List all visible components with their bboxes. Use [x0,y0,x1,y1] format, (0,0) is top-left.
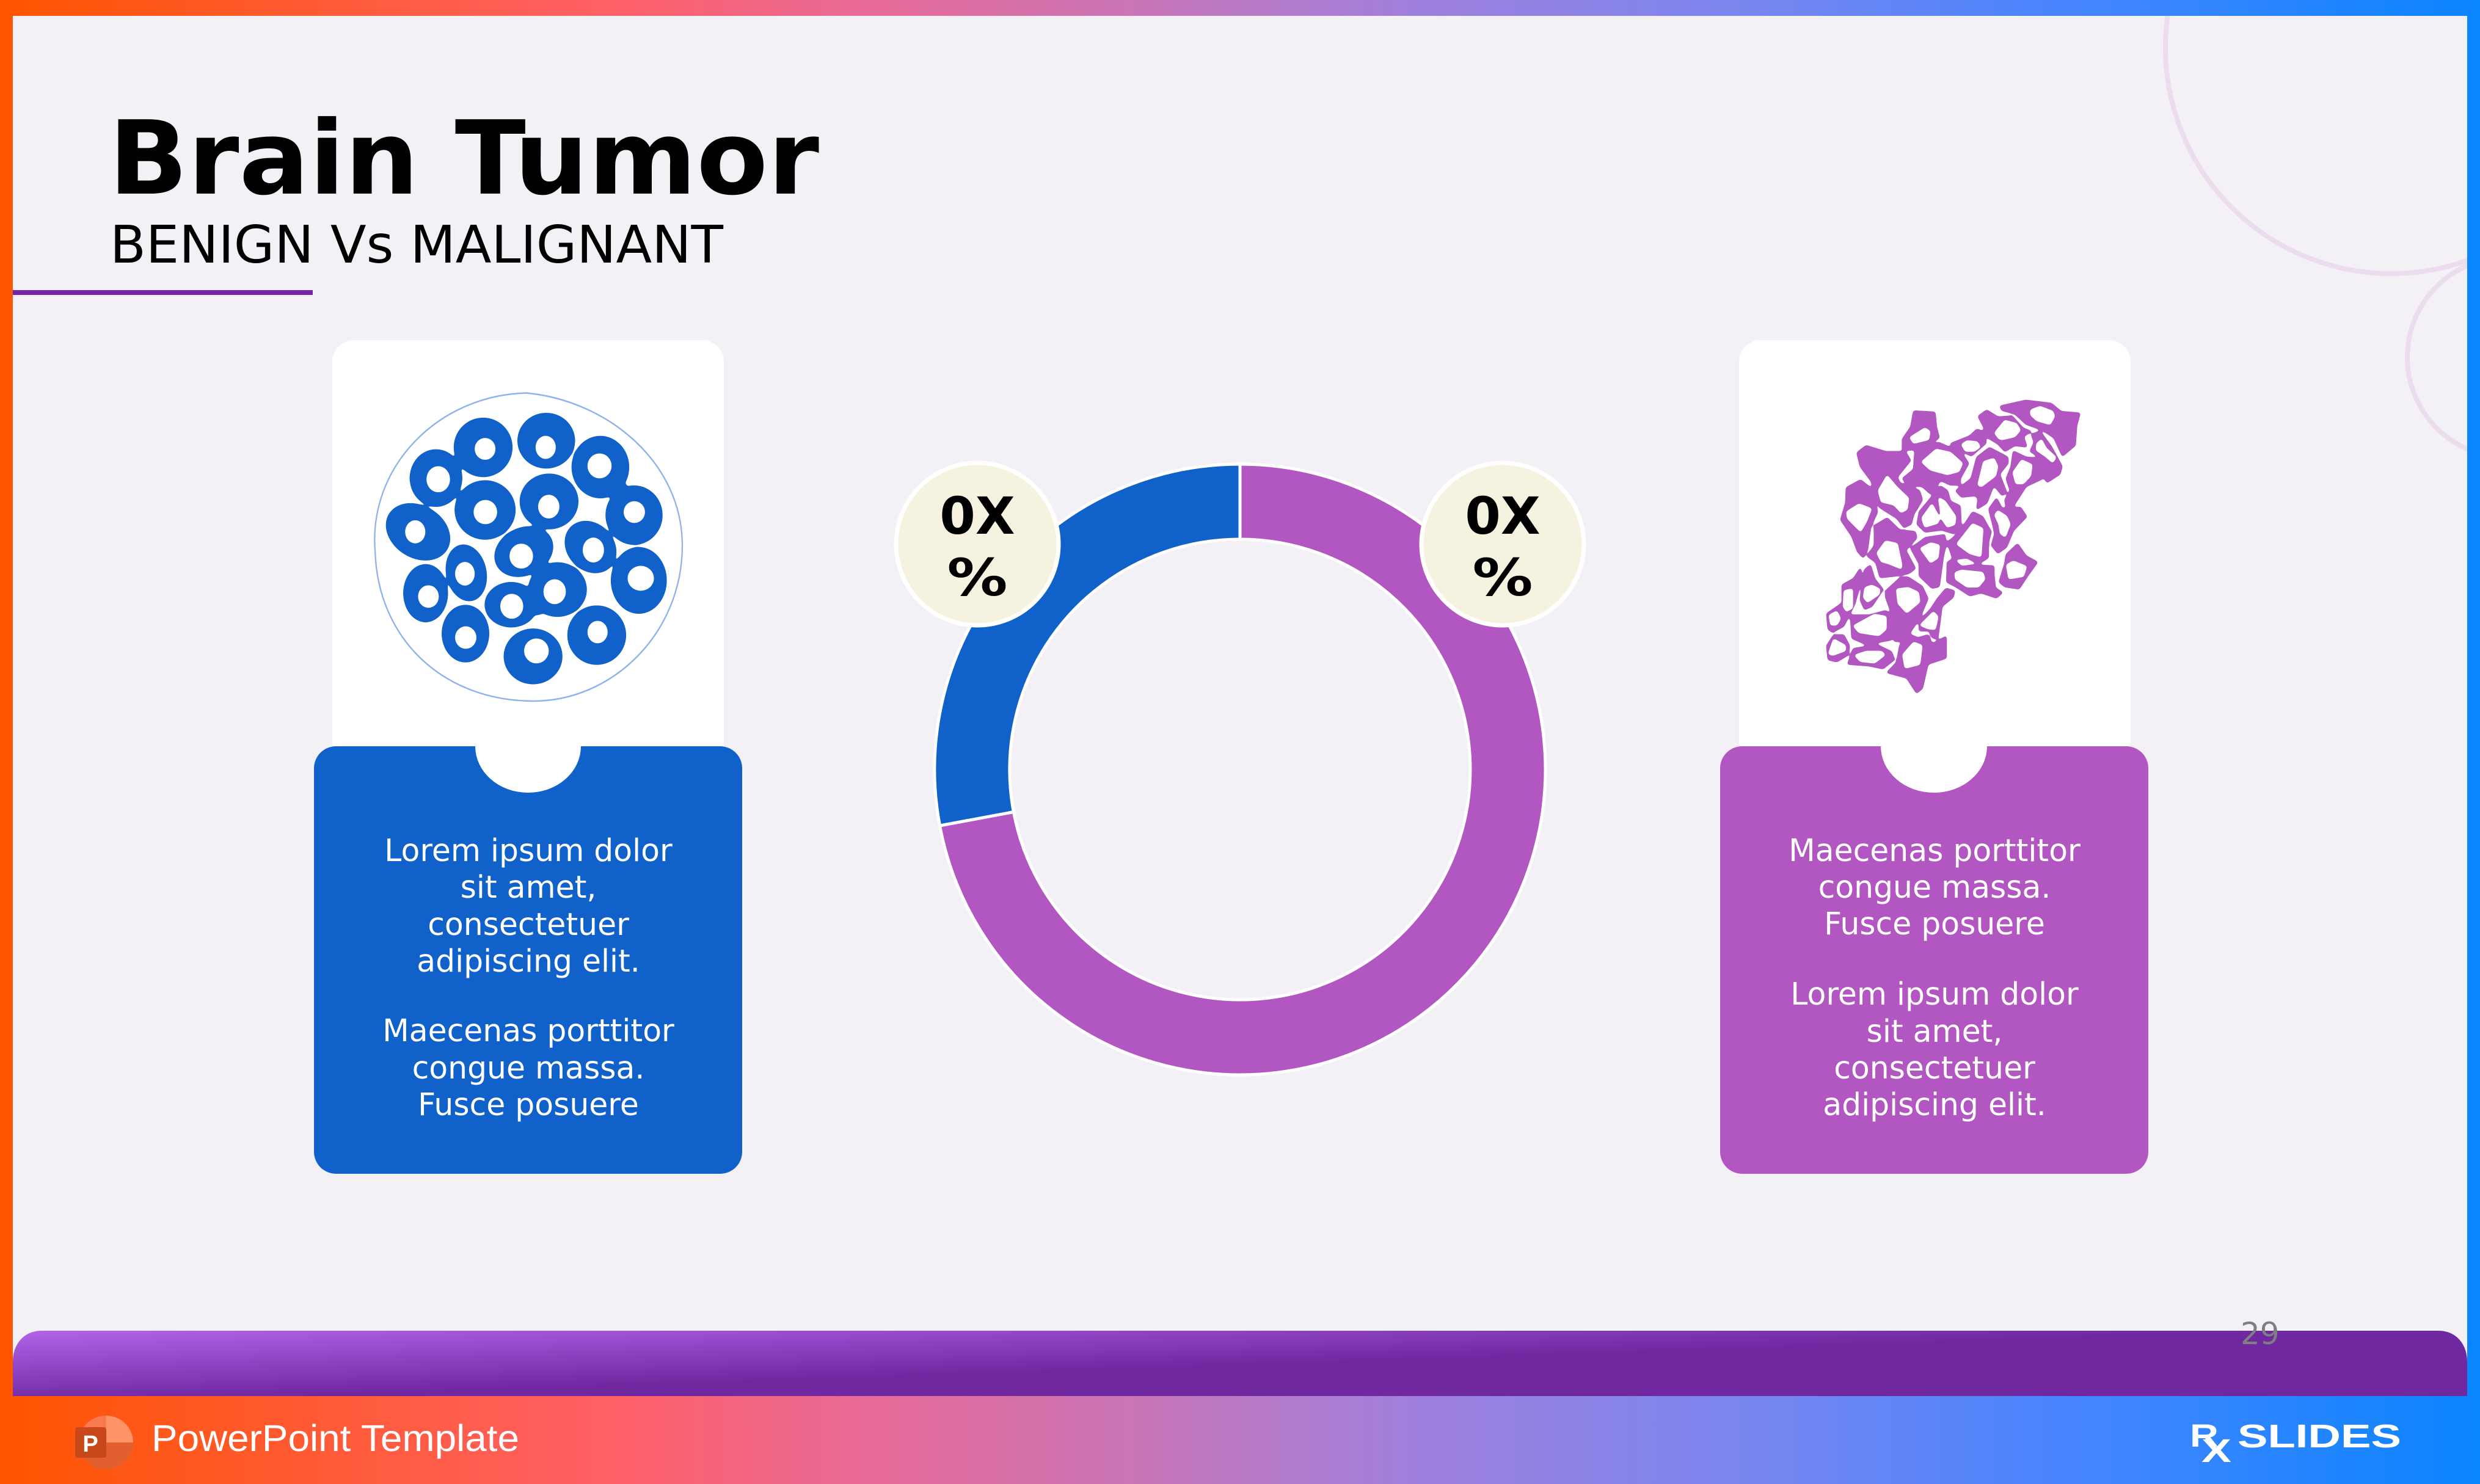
malignant body text: Lorem ipsum dolor [1790,976,2079,1012]
title underline [13,290,313,295]
footer text: PowerPoint Template [151,1417,519,1459]
benign body text: Maecenas porttitor [382,1013,674,1049]
benign notch [475,746,581,793]
malignant body text: sit amet, [1867,1013,2002,1049]
right border [2467,0,2480,1405]
donut segment: benign [935,464,1240,826]
benign image card [332,340,724,768]
benign text card [314,746,742,1174]
bottom purple band [13,1331,2467,1396]
malignant body text: Fusce posuere [1824,906,2045,942]
left border [0,0,13,1405]
logo: RX Slides: R [2190,1418,2219,1454]
icon: malignant cells [1827,401,2080,693]
icon: PowerPoint logo [75,1416,133,1469]
malignant body text: consectetuer [1834,1050,2035,1086]
benign body text: Lorem ipsum dolor [384,832,673,868]
malignant body text: Maecenas porttitor [1789,832,2081,868]
malignant body text: congue massa. [1818,869,2051,905]
callout: benign percent: % [947,548,1008,608]
panel: benign [314,340,742,1174]
malignant image card [1739,340,2131,768]
benign body text: Fusce posuere [418,1086,639,1122]
benign body text: congue massa. [412,1050,644,1086]
logo: RX Slides [2190,1418,2401,1469]
donut chart [935,464,1545,1075]
malignant text card [1720,746,2148,1174]
callout: malignant percent: % [1472,548,1533,608]
subtitle: BENIGN Vs MALIGNANT [110,215,724,275]
logo: RX Slides: SLIDES [2237,1418,2401,1455]
benign body text [382,832,674,1122]
benign body text: sit amet, [461,869,596,905]
benign body text: consectetuer [428,906,629,942]
title: Brain Tumor [109,100,819,218]
page number: 29 [2241,1316,2280,1351]
icon: benign cells [374,393,682,701]
callout: benign percent: 0X [939,486,1015,546]
callout: malignant percent: 0X [1465,486,1541,546]
donut segment: malignant [939,464,1545,1075]
panel: malignant [1720,340,2148,1174]
logo: RX Slides: X [2201,1433,2231,1469]
malignant body text: adipiscing elit. [1823,1086,2046,1122]
malignant notch [1881,746,1987,793]
callout: benign percent [896,463,1059,625]
callout: malignant percent [1421,463,1584,625]
footer gradient bar [0,1396,2480,1484]
benign body text: adipiscing elit. [417,943,640,979]
top gradient bar [0,0,2480,16]
icon: PowerPoint logo: P [82,1431,98,1457]
malignant body text [1789,832,2081,1122]
